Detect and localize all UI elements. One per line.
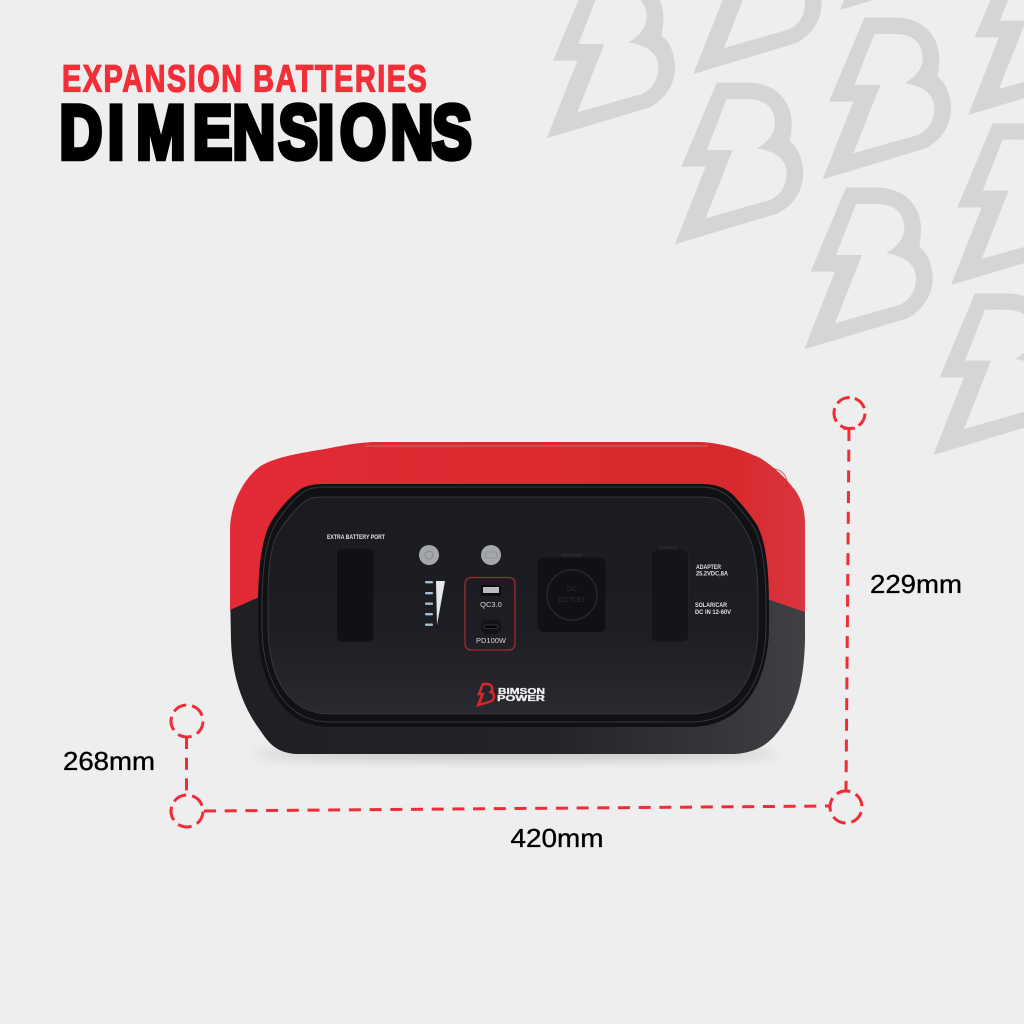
- battery level indicator: [425, 581, 445, 626]
- mode button: [481, 545, 501, 565]
- dc outlet cover: [537, 554, 606, 632]
- dc outlet cover: OUTLET: [558, 597, 587, 604]
- label: adapter: 25.2VDC,8A: [696, 570, 728, 578]
- measurement: width: 420mm: [510, 823, 604, 853]
- left port cover: [336, 548, 374, 642]
- usb ports box: [465, 578, 515, 650]
- usb-a port: [481, 585, 501, 596]
- top highlight: [365, 445, 708, 447]
- lower black body: [230, 590, 805, 754]
- depth dimension marker: [166, 700, 208, 832]
- label: qc3.0: QC3.0: [480, 600, 502, 609]
- width dimension marker: [204, 786, 867, 828]
- power button: [419, 545, 439, 565]
- wordmark: power: POWER: [497, 694, 545, 703]
- device shadow: [253, 749, 777, 759]
- wordmark: bimson: BIMSON: [498, 687, 545, 696]
- height dimension marker: [830, 393, 869, 791]
- upper red shell: [230, 442, 805, 612]
- right port cover: [651, 546, 688, 642]
- label: solar/car: DC IN 12-60V: [695, 609, 732, 616]
- front panel: [268, 497, 758, 714]
- icon: lightning b: [476, 683, 495, 707]
- label: adapter: ADAPTER: [696, 564, 721, 571]
- dc outlet cover: DC: [567, 586, 577, 593]
- measurement: height: 229mm: [870, 569, 962, 599]
- measurement: depth: 268mm: [63, 746, 155, 776]
- label: adapter: [696, 564, 728, 578]
- usb-c port: [481, 620, 501, 634]
- product: expansion battery: [230, 442, 805, 754]
- background pattern: lightning B logos: [547, 0, 1024, 455]
- corner detail: [771, 469, 787, 488]
- label: solar/car: [695, 602, 732, 616]
- brand logo: [476, 683, 545, 707]
- heading: expansion batteries: EXPANSION BATTERIES: [62, 58, 427, 101]
- front panel rim: [258, 484, 769, 727]
- heading: dimensions: DIMENSIONS: [60, 90, 472, 175]
- label: solar/car: SOLAR/CAR: [695, 602, 727, 609]
- label: extra battery port: EXTRA BATTERY PORT: [327, 534, 385, 541]
- title: [60, 58, 472, 175]
- label: pd100w: PD100W: [476, 636, 507, 645]
